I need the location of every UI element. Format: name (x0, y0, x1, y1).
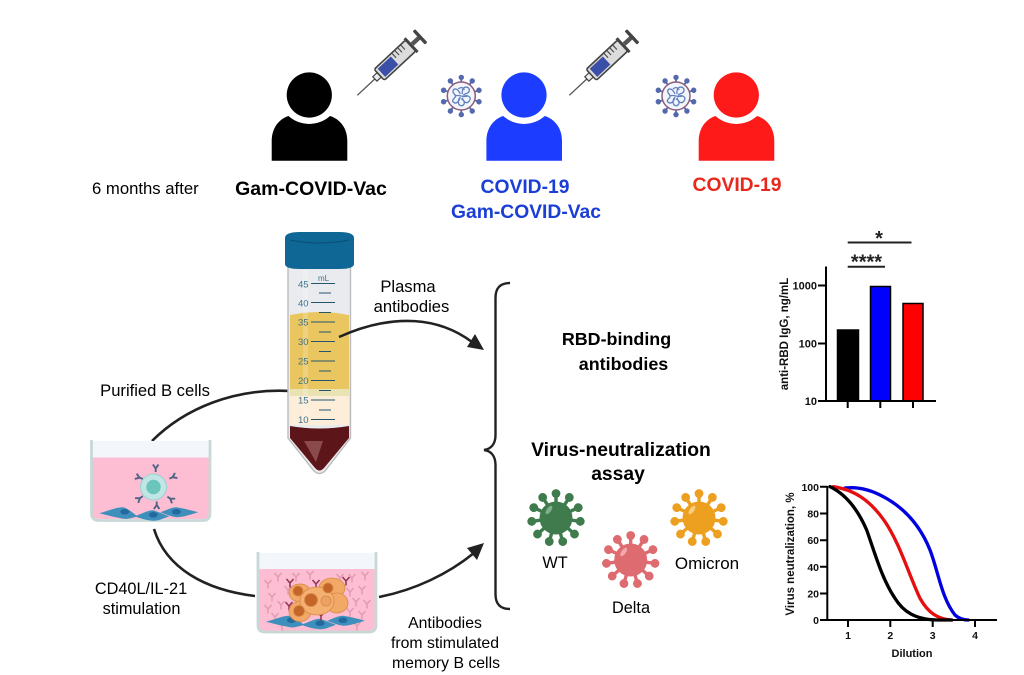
x tick labels: 4 (972, 630, 978, 642)
icon: blue person (486, 72, 562, 161)
icon: well with stimulated memory B cells (258, 552, 376, 632)
tube scale: 15 (298, 396, 309, 406)
tube scale: 25 (298, 356, 309, 368)
y tick labels: 20 (807, 588, 819, 600)
axes (820, 486, 997, 627)
x tick labels: 3 (930, 630, 936, 642)
tube scale: 45 (298, 280, 309, 290)
icon: red person (699, 72, 774, 161)
icon: Delta virus (601, 531, 660, 589)
label: CD40L/IL-21 stimulation: CD40L/IL-21 (95, 580, 187, 598)
line chart: virus neutralization (785, 482, 997, 660)
tube scale: mL (318, 274, 330, 283)
label: COVID-19 red: COVID-19 (693, 175, 781, 196)
icon: black person (272, 72, 347, 161)
label: Omicron: Omicron (675, 554, 739, 573)
x tick labels: 2 (887, 630, 893, 642)
label: RBD-binding antibodies: RBD-binding (562, 329, 671, 349)
y tick labels: 10 (805, 396, 817, 408)
curves (830, 487, 968, 620)
label: CD40L/IL-21 stimulation: stimulation (103, 600, 180, 618)
label: Antibodies from stimulated memory B cells: Antibodies (408, 615, 482, 632)
icon: syringe second (563, 29, 640, 102)
y tick labels: 100 (799, 338, 817, 350)
axes (818, 266, 936, 408)
label: Purified B cells: Purified B cells (100, 381, 210, 400)
tube scale: 40 (298, 298, 309, 310)
significance brackets (848, 228, 912, 274)
y tick labels: 0 (813, 615, 819, 627)
tube scale: 30 (298, 337, 309, 348)
group: COVID-19 convalescent (655, 72, 781, 196)
arrow: purified B cells (152, 391, 290, 441)
label: Virus-neutralization assay: assay (591, 464, 645, 485)
bar chart: anti-RBD IgG (779, 228, 936, 408)
x axis title: Dilution (892, 648, 933, 660)
icon: virus (440, 75, 482, 117)
significance brackets: **** (851, 252, 882, 274)
x tick labels: 1 (845, 630, 851, 642)
arrow: plasma antibodies (339, 321, 484, 350)
brace (484, 283, 510, 609)
y axis title: anti-RBD IgG, ng/mL (779, 278, 791, 390)
group: Gam-COVID-Vac vaccinated (235, 29, 428, 200)
tube scale (298, 274, 335, 426)
y tick labels: 100 (801, 482, 819, 494)
icon: centrifuge tube (285, 232, 354, 474)
y tick labels: 1000 (793, 280, 817, 292)
significance brackets: * (875, 228, 883, 250)
label: COVID-19 Gam-COVID-Vac: Gam-COVID-Vac (451, 202, 601, 223)
tube scale: 20 (298, 376, 309, 387)
label: RBD-binding antibodies: antibodies (579, 354, 668, 374)
label: Antibodies from stimulated memory B cells: from stimulated (391, 635, 499, 652)
label: Delta: Delta (612, 599, 651, 617)
icon: WT virus (527, 489, 585, 547)
label: Plasma antibodies: Plasma (380, 277, 436, 296)
icon: well with purified B cell (92, 440, 210, 521)
arrow: stimulated antibodies (379, 543, 484, 597)
tube scale: 10 (298, 415, 309, 426)
icon: Omicron virus (670, 489, 728, 547)
arrow: CD40L/IL-21 stimulation (154, 529, 255, 596)
label: 6 months after: 6 months after (92, 179, 199, 198)
icon: virus second (655, 75, 697, 117)
y tick labels: 60 (807, 535, 819, 547)
icon: syringe (351, 29, 428, 102)
label: WT: WT (542, 554, 568, 572)
bars (838, 286, 923, 401)
y tick labels: 40 (807, 562, 819, 574)
group: COVID-19 plus vaccine (440, 29, 640, 223)
label: Plasma antibodies: antibodies (374, 297, 449, 316)
y axis title: Virus neutralization, % (785, 492, 797, 616)
label: Gam-COVID-Vac: Gam-COVID-Vac (235, 178, 387, 200)
label: Antibodies from stimulated memory B cells: memory B cells (392, 655, 500, 672)
label: Virus-neutralization assay: Virus-neutralization (531, 440, 711, 461)
stimulated cell cluster (289, 578, 348, 622)
label: COVID-19 Gam-COVID-Vac: COVID-19 (481, 177, 569, 198)
y tick labels: 80 (807, 508, 819, 520)
tube scale: 35 (298, 318, 309, 328)
